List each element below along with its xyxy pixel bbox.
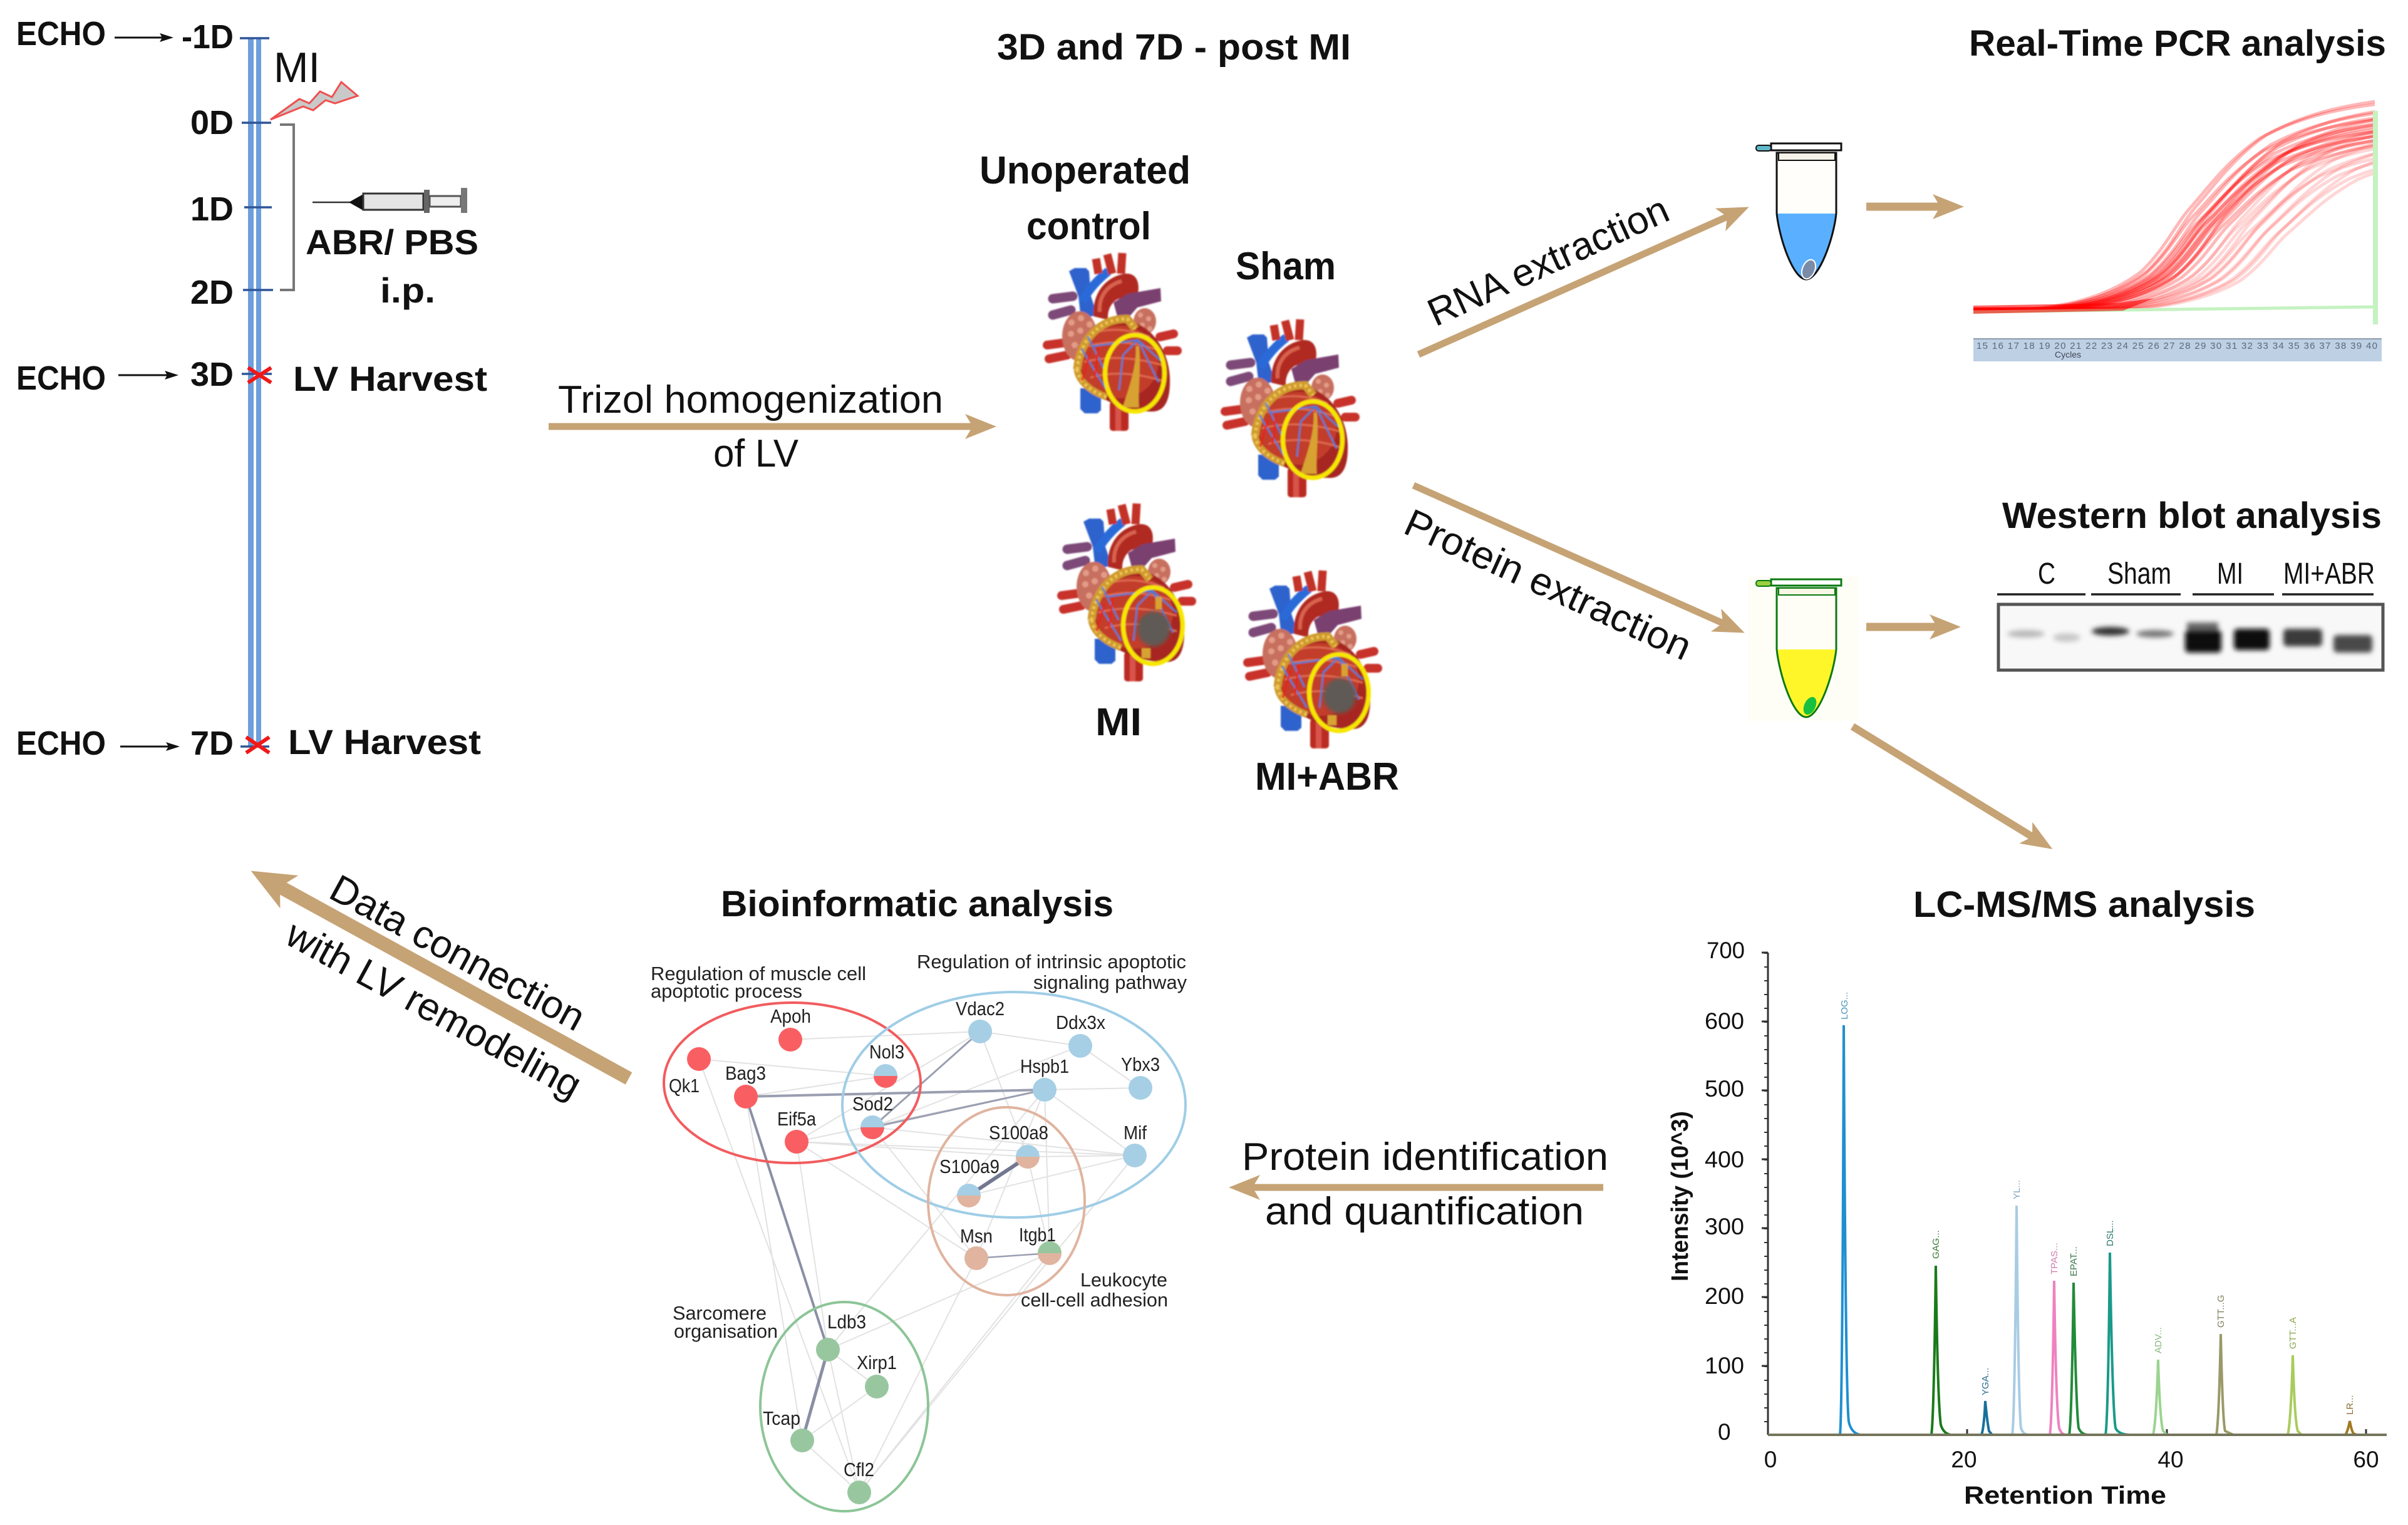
y tick labels: 700 [1707,938,1745,963]
heading: bioinformatic analysis: Bioinformatic analysis [721,884,1114,924]
peak labels: GAG... [1931,1230,1941,1259]
cluster labels: signaling pathway [1033,971,1187,993]
y tick labels: 200 [1705,1283,1744,1309]
chart: western blot: Sham [2107,557,2171,591]
arrow: RNA extraction [1418,217,1727,354]
treatment label [306,222,478,310]
peak labels: YL... [2012,1180,2022,1199]
peak labels: TPAS... [2049,1243,2060,1274]
heading: real-time PCR: Real-Time PCR analysis [1969,23,2386,64]
label: protein extraction: Protein extraction [1398,501,1698,669]
peaks [1840,1025,2357,1435]
cluster labels: Regulation of intrinsic apoptotic [917,951,1186,973]
chart: protein network [651,951,1187,1511]
chart: western blot [1997,557,2383,670]
node labels: Nol3 [869,1041,904,1063]
axes [1762,953,2387,1435]
cluster labels: Sarcomere [673,1302,767,1324]
peak labels: LOG... [1839,992,1850,1020]
trizol label: of LV [713,432,799,475]
node labels: Ybx3 [1121,1053,1160,1075]
label: sham: Sham [1236,245,1336,288]
label: data connection: with LV remodeling [278,912,589,1107]
x tick labels: 60 [2353,1447,2379,1472]
node labels: Sod2 [852,1093,893,1115]
day labels: 3D [190,356,234,393]
node labels: S100a9 [939,1155,1000,1177]
y tick labels: 300 [1705,1214,1744,1239]
echo labels with arrows: ECHO [16,725,106,762]
strong edges [746,1031,1050,1440]
x tick labels: 0 [1764,1447,1777,1472]
label: unoperated control: control [1026,205,1151,248]
y tick labels: 500 [1705,1076,1744,1102]
cluster labels: Leukocyte [1080,1269,1167,1291]
node labels: Apoh [770,1005,811,1027]
peak labels [1839,992,2355,1415]
echo labels with arrows [16,15,168,762]
treatment label: i.p. [380,271,435,310]
red cross and harvest at 7D: LV Harvest [288,722,481,762]
icon: protein tube [1748,576,1858,721]
cluster labels [651,951,1187,1342]
node labels: Msn [960,1225,993,1247]
echo labels with arrows: ECHO [16,359,106,397]
heart: unoperated control [1047,253,1177,431]
y tick labels [1705,938,1745,1445]
heading: western blot: Western blot analysis [2002,495,2382,536]
y axis title: Intensity (10^3) [1667,1111,1693,1281]
x tick labels: 20 [1951,1447,1977,1472]
icon: lightning bolt [271,82,358,120]
day labels: 0D [190,104,234,142]
label: MI+ABR: MI+ABR [1255,755,1399,799]
peak labels: DSL... [2105,1220,2116,1246]
light edges [699,1031,1140,1492]
label: MI: MI [1095,701,1142,744]
chart: PCR amplification curves: 15 16 17 18 19 20 21 22 23 24 25 26 27 28 29 30 31 32 33 34 35 36 37 38 39 40 [1977,341,2377,351]
panel: timeline [16,15,487,762]
timeline rails [248,38,261,747]
heart: sham [1225,319,1355,497]
node labels: Itgb1 [1019,1224,1056,1246]
chart: PCR amplification curves: Cycles [2055,349,2081,359]
node labels: Hspb1 [1020,1055,1069,1077]
trizol label: Trizol homogenization [558,378,943,421]
chart: western blot: C [2038,557,2055,591]
label: RNA extraction: RNA extraction [1421,188,1675,335]
chart: western blot: MI+ABR [2283,557,2375,591]
y tick labels: 0 [1718,1419,1731,1445]
heart: MI [1062,504,1192,681]
x axis title: Retention Time [1964,1482,2166,1509]
label: unoperated control: Unoperated [979,149,1191,192]
label: protein identification: Protein identification [1242,1135,1608,1179]
node labels: Ddx3x [1056,1011,1105,1033]
trizol label [558,378,943,475]
cluster labels: Regulation of muscle cell [651,963,866,985]
cluster outlines [664,992,1186,1511]
label: unoperated control [979,149,1191,248]
day labels: 2D [190,274,234,311]
node labels: Eif5a [777,1108,817,1130]
peak labels: ADV... [2153,1327,2164,1353]
heading: LC-MS/MS: LC-MS/MS analysis [1913,884,2255,925]
peak labels: GTT...A [2288,1317,2298,1349]
day labels [182,18,234,762]
y tick labels: 400 [1705,1147,1744,1172]
node labels: Cfl2 [844,1459,874,1481]
peak labels: LR... [2345,1395,2355,1415]
x tick labels [1764,1447,2379,1472]
MI label: MI [274,44,320,91]
peak labels: GTT...G [2216,1295,2226,1328]
chart: chromatogram [1667,938,2387,1509]
day labels: 7D [190,725,234,762]
node labels: Vdac2 [956,998,1005,1020]
panel: heart groups [979,149,1399,799]
cluster labels: organisation [674,1320,778,1342]
arrow: tube to LC-MS [1853,726,2032,837]
node labels: Mif [1124,1122,1147,1144]
label: protein identification [1242,1135,1608,1233]
icon: RNA tube [1756,143,1841,281]
day labels: -1D [182,18,234,56]
y tick labels: 100 [1705,1353,1744,1378]
peak labels: YGA... [1980,1368,1991,1395]
cluster labels: cell-cell adhesion [1021,1289,1168,1311]
node labels: Xirp1 [857,1352,897,1373]
echo labels with arrows: ECHO [16,15,106,53]
x tick labels: 40 [2157,1447,2184,1472]
node labels: Qk1 [669,1075,700,1097]
heading: 3D and 7D post MI: 3D and 7D - post MI [997,27,1351,68]
chart: western blot: MI [2217,557,2243,591]
peak labels: EPAT... [2069,1246,2079,1276]
treatment label: ABR/ PBS [306,222,478,262]
icon: syringe [313,188,467,213]
red cross and harvest at 3D: LV Harvest [293,359,487,398]
arrow: protein identification to bioinformatics [1253,1184,1603,1191]
label: protein identification: and quantification [1265,1190,1584,1233]
heart: MI+ABR [1248,571,1378,748]
arrow: data connection [280,887,629,1078]
nodes [687,1020,1152,1504]
arrow: tube to western blot [1866,623,1937,631]
node labels: Ldb3 [827,1311,866,1333]
day labels: 1D [190,190,234,228]
arrow: tube to PCR [1866,203,1940,210]
node labels: Tcap [763,1407,800,1429]
arrow: trizol to hearts [549,423,973,430]
arrow: protein extraction [1413,485,1723,623]
node labels: S100a8 [989,1122,1048,1144]
node labels [669,998,1160,1481]
bracket [280,125,294,290]
cluster labels: apoptotic process [651,980,802,1002]
y tick labels: 600 [1705,1008,1744,1034]
chart: PCR amplification curves [1973,100,2382,361]
node labels: Bag3 [725,1062,766,1084]
label: data connection: Data connection [323,867,592,1040]
